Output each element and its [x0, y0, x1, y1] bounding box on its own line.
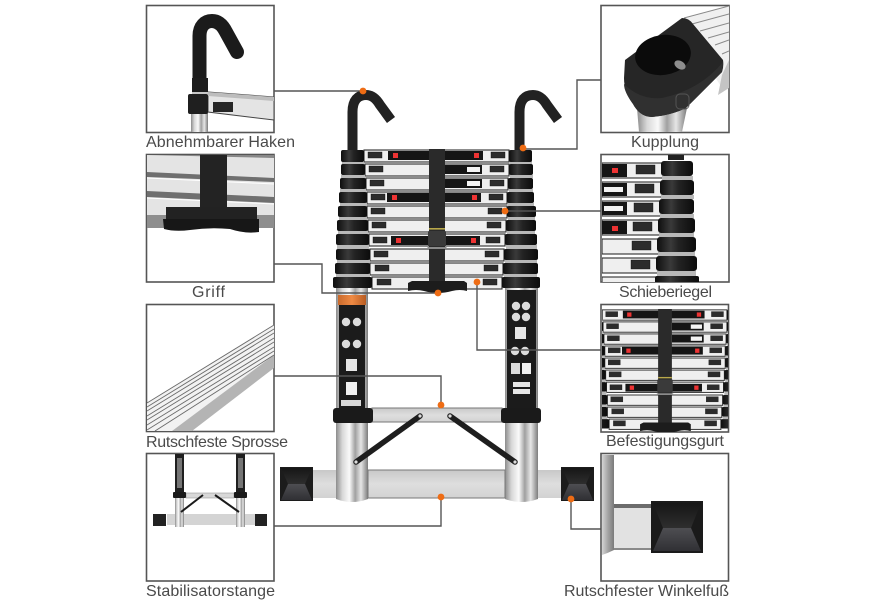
- leader: Abnehmbarer Haken: [274, 90, 363, 92]
- leader: Schieberiegel: [505, 210, 601, 212]
- icon: anti-slip foot close-up: [602, 455, 703, 555]
- rungs and collars: [333, 150, 540, 289]
- right foot: [561, 467, 594, 501]
- label: Befestigungsgurt: Befestigungsgurt: [606, 433, 725, 450]
- right upper tube with sticker: [505, 288, 538, 408]
- fastening strap and handle: [408, 149, 467, 293]
- leader: Griff: [274, 264, 438, 293]
- icon: grip handle close-up: [147, 155, 274, 233]
- icon: sliding latch close-up: [602, 155, 699, 285]
- left lower tube: [336, 423, 368, 502]
- label: Griff: Griff: [192, 284, 226, 301]
- left hook: [352, 95, 391, 150]
- leader: Rutschfester Winkelfuß: [571, 499, 601, 529]
- right hook: [520, 95, 558, 150]
- panel: Befestigungsgurt: [600, 304, 730, 433]
- label: Rutschfeste Sprosse: Rutschfeste Sprosse: [146, 434, 288, 451]
- icon: strap close-up: [602, 309, 728, 432]
- stabiliser bar left section: [313, 470, 336, 498]
- panel: Abnehmbarer Haken: [146, 6, 274, 133]
- diagonal braces: [354, 414, 517, 464]
- label: Schieberiegel: Schieberiegel: [619, 284, 712, 301]
- label: Rutschfester Winkelfuß: Rutschfester Winkelfuß: [564, 583, 729, 600]
- leader: Stabilisatorstange: [274, 497, 441, 526]
- left upper tube with sticker: [336, 288, 368, 408]
- leader: Rutschfeste Sprosse: [274, 376, 441, 405]
- panel: Stabilisatorstange: [146, 454, 274, 581]
- cross rung: [372, 408, 502, 422]
- left tube collar: [333, 408, 373, 423]
- panel: Rutschfeste Sprosse: [146, 304, 274, 432]
- panel: Kupplung: [601, 6, 729, 132]
- icon: black coupling close-up: [624, 6, 729, 132]
- marker dots: [360, 88, 574, 502]
- icon: anti-slip rung grooves: [147, 325, 274, 431]
- stabiliser bar centre section: [368, 470, 505, 498]
- leader: Kupplung: [523, 80, 601, 149]
- label: Stabilisatorstange: Stabilisatorstange: [146, 583, 275, 600]
- right tube collar: [501, 408, 541, 423]
- right lower tube: [505, 423, 538, 502]
- panel: Griff: [146, 154, 274, 282]
- icon: miniature ladder base: [153, 454, 267, 527]
- panel: Schieberiegel: [601, 154, 729, 285]
- stabiliser bar right section: [538, 470, 561, 498]
- main ladder: telescopic ladder with hooks: [280, 95, 594, 502]
- label: Kupplung: Kupplung: [631, 134, 699, 151]
- left foot: [280, 467, 313, 501]
- leader: Befestigungsgurt: [477, 282, 601, 350]
- panel: Rutschfester Winkelfuß: [601, 454, 728, 581]
- icon: hook close-up: [188, 21, 274, 133]
- label: Abnehmbarer Haken: Abnehmbarer Haken: [146, 134, 295, 151]
